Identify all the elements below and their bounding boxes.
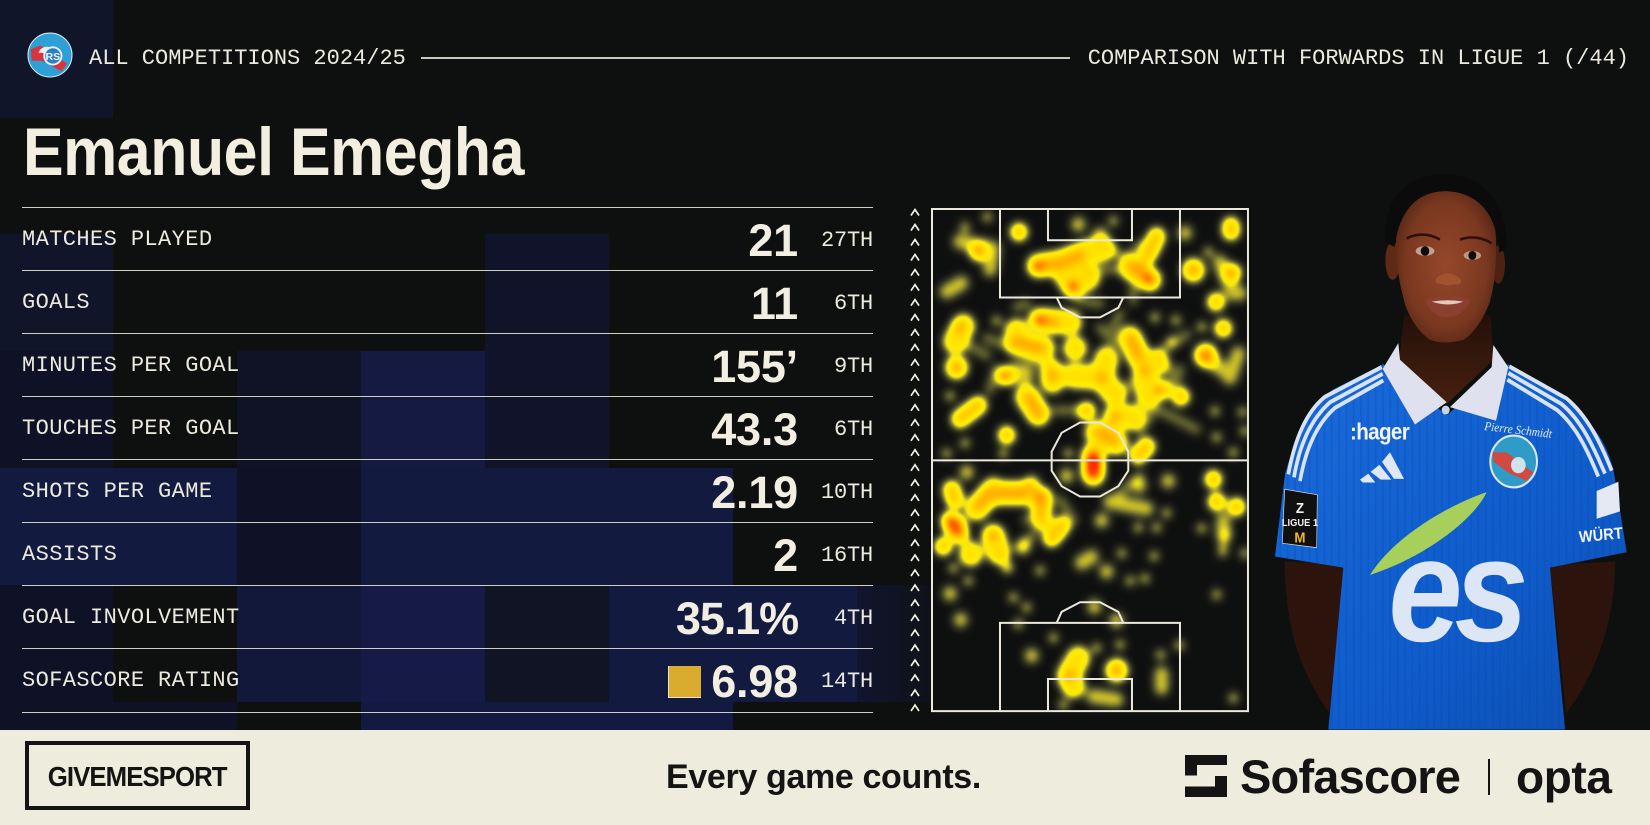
sponsor: hager: :hager [1350, 418, 1410, 445]
pitch markings [932, 209, 1248, 711]
sleeve sponsor: WÜRT [1578, 525, 1624, 547]
league patch [1282, 489, 1319, 548]
logo: Sofascore mark [1185, 755, 1227, 797]
neck [1399, 315, 1493, 404]
stat row: matches played: 21 [748, 215, 798, 266]
title: player name: Emanuel Emegha [23, 114, 524, 190]
stat row: goal involvement: GOAL INVOLVEMENT [22, 605, 240, 630]
stat row: assists: 2 [773, 530, 798, 581]
club crest: RS [46, 51, 60, 63]
stat row: sofascore rating: SOFASCORE RATING [22, 668, 240, 693]
league patch: LIGUE 1 [1282, 518, 1319, 529]
stat row: goals: 6TH [834, 291, 873, 316]
stat row: touches per goal [22, 396, 873, 460]
logo: opta: opta [1516, 751, 1612, 803]
sleeve sponsor [1578, 482, 1624, 547]
stat row: shots per game [22, 459, 873, 523]
stat row: goals: GOALS [22, 290, 90, 315]
stat row: minutes per goal: MINUTES PER GOAL [22, 353, 240, 378]
sponsor: es: es [1388, 507, 1525, 672]
stat row: shots per game: 2.19 [711, 467, 798, 518]
stat row: touches per goal: TOUCHES PER GOAL [22, 416, 240, 441]
stat row: matches played [22, 207, 873, 271]
club crest [28, 32, 72, 78]
logo: GIVEMESPORT: GIVEMESPORT [48, 761, 227, 792]
stat row: assists: ASSISTS [22, 542, 117, 567]
player photo illustration [1275, 191, 1627, 730]
mouth [1425, 296, 1471, 317]
stat row: goal involvement [22, 585, 873, 649]
ears [1385, 241, 1400, 280]
header rule [421, 57, 1070, 59]
stat row: touches per goal: 6TH [834, 417, 873, 442]
stat row: matches played: 27TH [821, 228, 873, 253]
icon: three bars logo [1360, 452, 1404, 483]
hair [1385, 174, 1507, 252]
stat row: sofascore rating: 6.98 [711, 656, 798, 707]
league patch: Z [1296, 500, 1304, 516]
stats table [22, 207, 873, 713]
nose [1436, 274, 1461, 285]
icon: attack direction chevrons [910, 208, 920, 712]
stat row: minutes per goal: 155’ [711, 341, 798, 392]
stat row: sofascore rating [22, 648, 873, 713]
logo: GIVEMESPORT [25, 741, 250, 810]
stat row: assists: 16TH [821, 543, 873, 568]
face [1396, 187, 1496, 343]
heat blobs [943, 217, 1245, 705]
jersey [1275, 364, 1627, 730]
stat row: goals: 11 [751, 278, 798, 329]
stat row: matches played: MATCHES PLAYED [22, 227, 212, 252]
sleeve stripes [1288, 366, 1612, 481]
brows and eyes [1407, 235, 1492, 260]
stat row: goal involvement: 35.1% [676, 593, 798, 644]
stat row: shots per game: SHOTS PER GAME [22, 479, 212, 504]
stat row: goals [22, 270, 873, 334]
stat row: assists [22, 522, 873, 586]
stat row: minutes per goal: 9TH [834, 354, 873, 379]
header right label: COMPARISON WITH FORWARDS IN LIGUE 1 (/44) [1088, 46, 1629, 71]
footer band [0, 730, 1650, 825]
chart: touch heatmap on pitch [931, 208, 1249, 712]
stat row: minutes per goal [22, 333, 873, 397]
stat row: touches per goal: 43.3 [711, 404, 798, 455]
jersey crest [1490, 436, 1537, 487]
stat row: shots per game: 10TH [821, 480, 873, 505]
tagline: Every game counts. [666, 758, 981, 796]
logo: Sofascore wordmark: Sofascore [1240, 750, 1460, 803]
rating swatch [668, 666, 701, 698]
stat row: sofascore rating: 14TH [821, 669, 873, 694]
collar [1383, 343, 1508, 424]
green swoosh [1370, 492, 1487, 575]
league patch: M [1294, 529, 1306, 546]
sponsor: Pierre Schmidt: Pierre Schmidt [1483, 418, 1553, 441]
stat row: goal involvement: 4TH [834, 606, 873, 631]
arms [1285, 561, 1615, 713]
divider [1488, 759, 1490, 795]
header left label: ALL COMPETITIONS 2024/25 [89, 46, 406, 71]
